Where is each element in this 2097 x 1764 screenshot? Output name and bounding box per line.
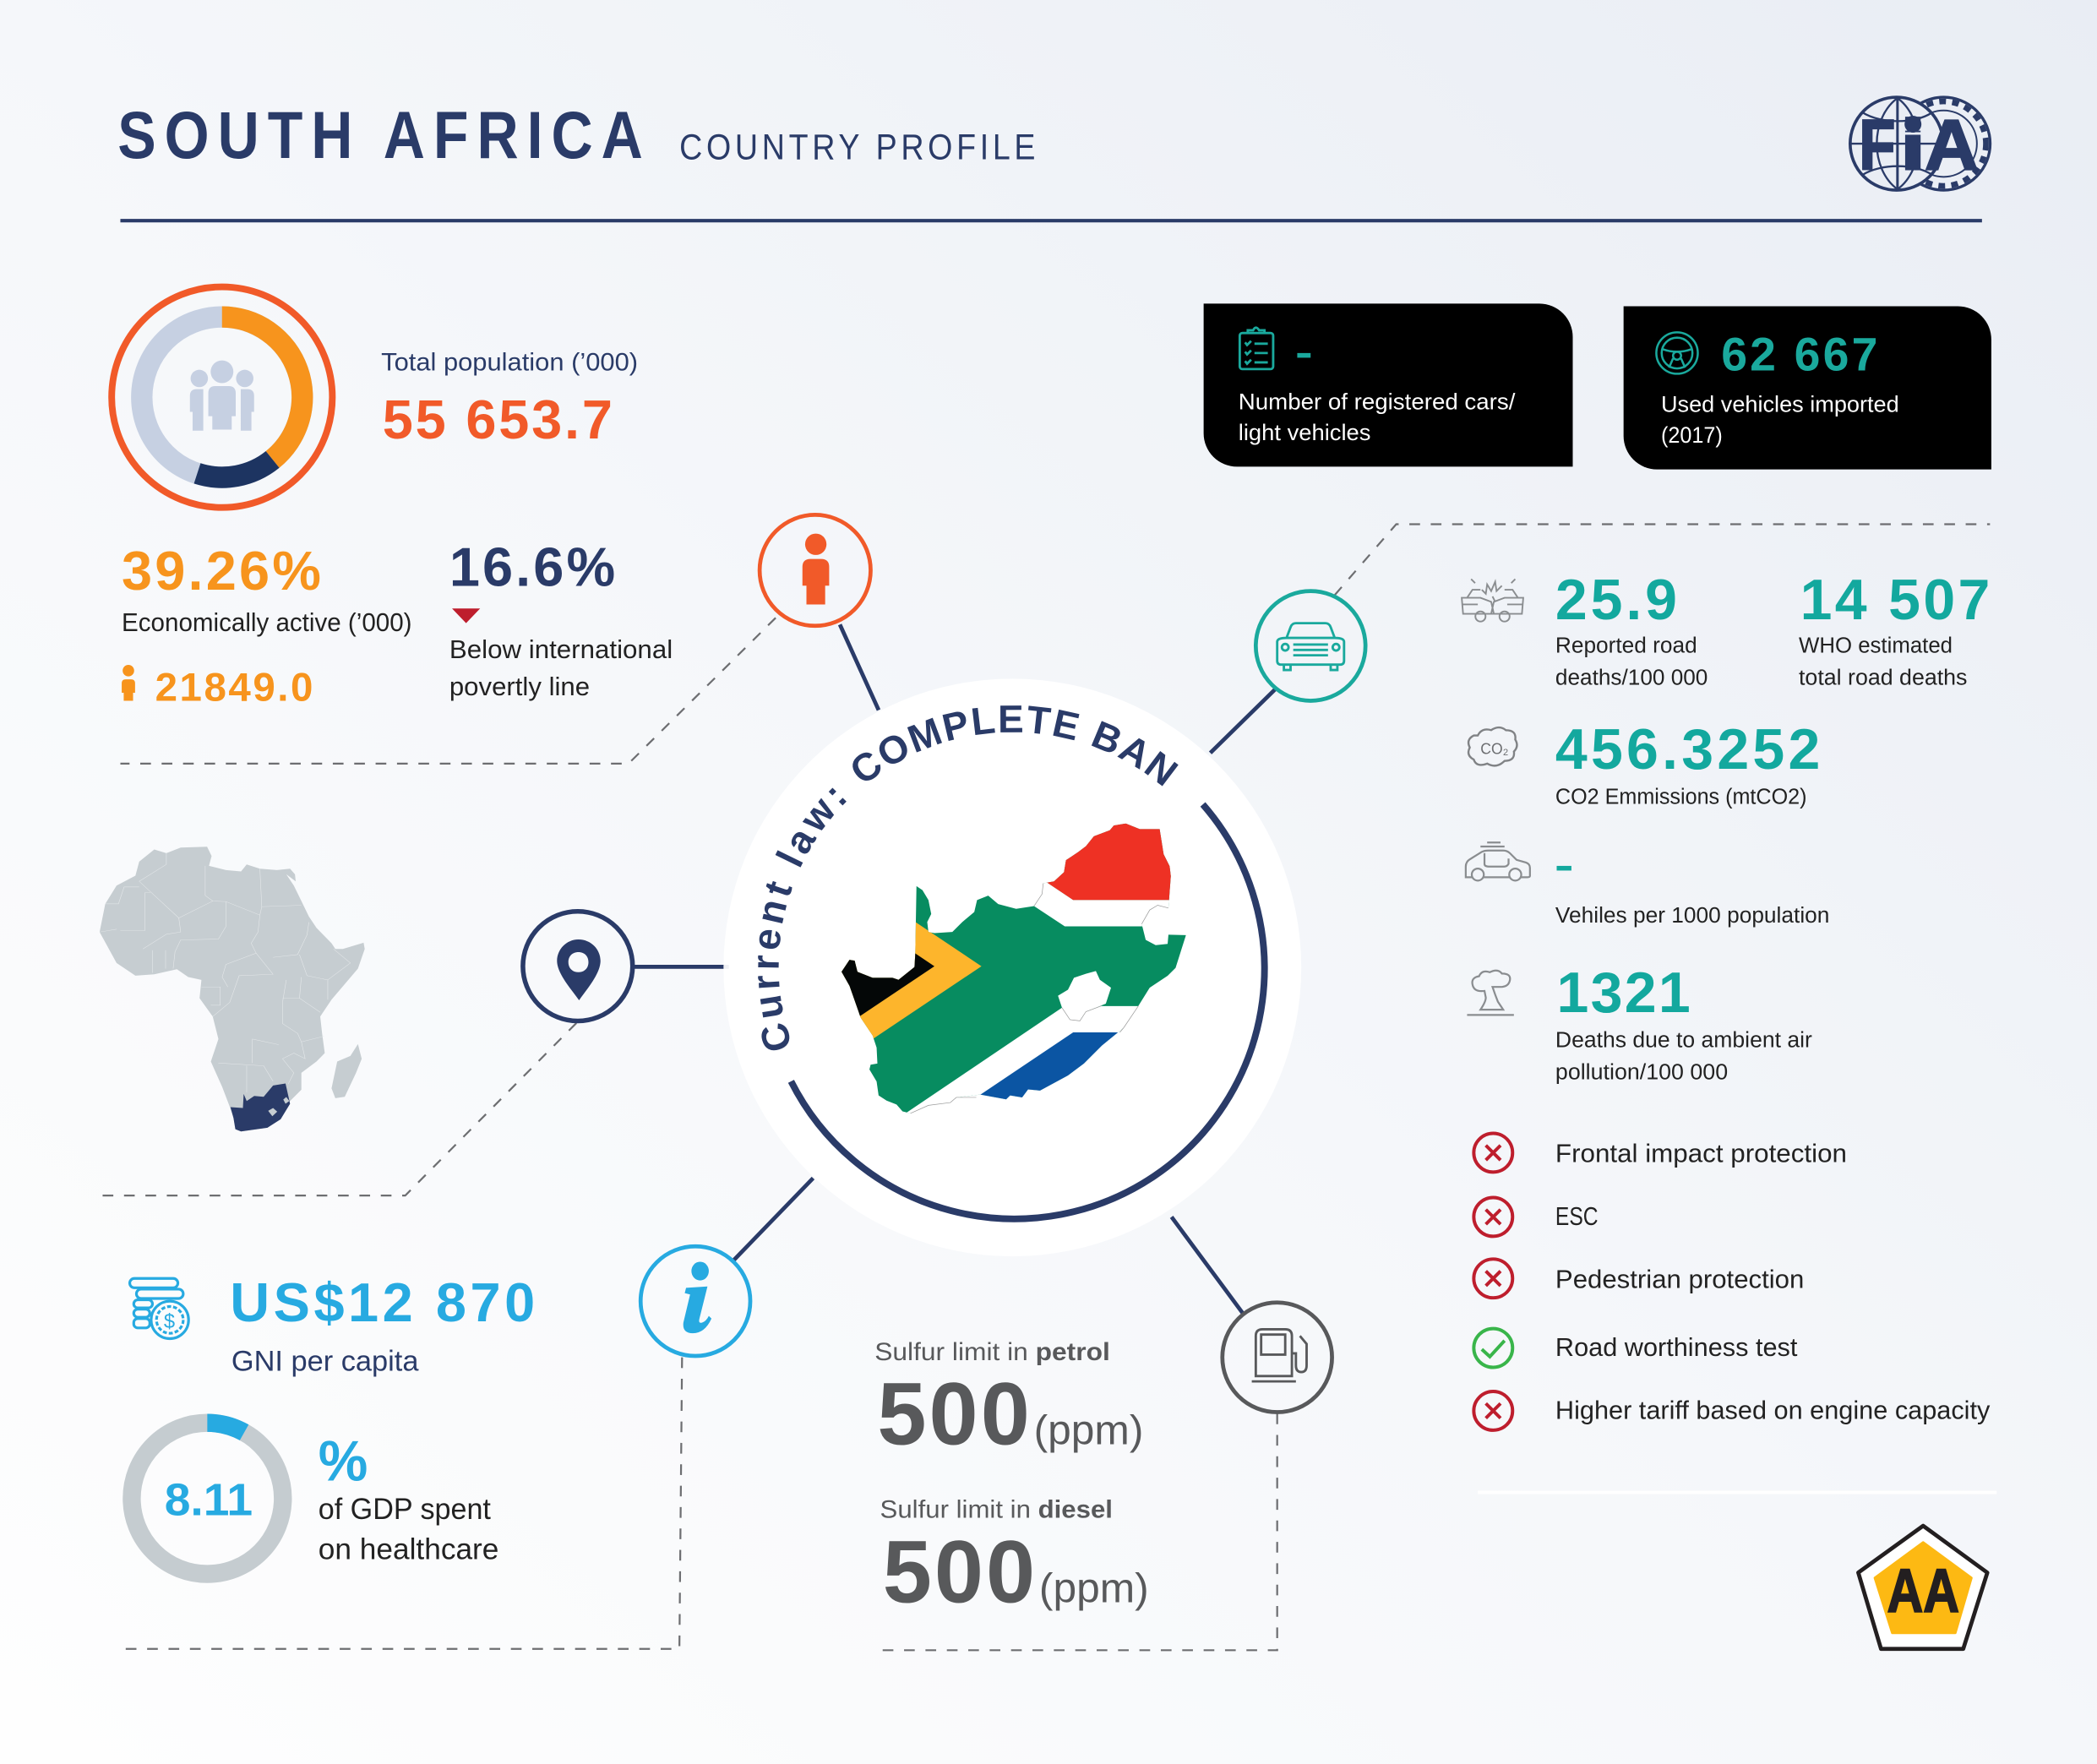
air pollution stat [1467,961,1812,1084]
poverty stat: 16.6% [449,536,615,597]
logo: FIA: i [1900,106,1925,184]
logo: FIA [1850,97,1991,190]
air pollution stat: Deaths due to ambient air [1555,1026,1812,1052]
hub: central circle [723,679,1301,1255]
flag map of South Africa [842,823,1186,1113]
item: tariff: Higher tariff based on engine capacity [1555,1395,1991,1424]
economically active: Economically active (’000) [122,607,412,637]
card: used vehicles [1624,306,1991,470]
title: SOUTH AFRICA [117,97,649,172]
icon: people [190,361,254,431]
sulfur limit: diesel: Sulfur limit in diesel [880,1496,1113,1524]
road deaths stats: WHO estimated [1799,632,1953,657]
CO2 emissions stat [1468,717,1820,808]
GNI per capita [130,1271,535,1377]
total population [381,348,638,450]
card: registered cars: Number of registered cars/ [1239,389,1516,414]
healthcare text: % [319,1429,368,1493]
healthcare text: on healthcare [319,1533,498,1566]
sulfur limit: petrol [874,1338,1143,1464]
sulfur limit: diesel: (ppm) [1039,1565,1149,1611]
road deaths stats: deaths/100 000 [1555,664,1708,689]
item: road worthiness [1473,1329,1798,1368]
item: frontal impact [1473,1134,1847,1172]
CO2 emissions stat: 456.3252 [1555,717,1820,781]
icon: CO2 cloud: CO₂ [1480,741,1509,758]
poverty stat [449,536,673,701]
road deaths stats [1462,568,1990,689]
air pollution stat: 1321 [1557,961,1691,1025]
icon: steering wheel [1656,332,1697,373]
item: road worthiness: Road worthiness test [1555,1332,1798,1362]
subtitle: COUNTRY PROFILE [679,127,1038,167]
poverty stat: povertly line [449,672,590,701]
icon: car side [1466,842,1530,880]
curved text: current law: Current law: COMPLETE BAN [758,705,1179,1051]
healthcare donut chart: 8.11 [165,1474,253,1525]
road deaths stats: Reported road [1555,632,1697,657]
vehicles per 1000 stat: Vehiles per 1000 population [1555,902,1829,928]
card: used vehicles: 62 667 [1721,328,1877,380]
poverty stat: Below international [449,634,673,664]
sulfur limit: diesel: 500 [883,1522,1035,1621]
item: pedestrian [1473,1259,1804,1298]
icon: person circle [760,514,870,626]
card: used vehicles: (2017) [1661,422,1723,448]
icon: coins [130,1278,188,1338]
economically active: 39.26% [122,540,321,602]
sulfur limit: petrol: (ppm) [1034,1408,1143,1454]
CO2 emissions stat: CO2 Emmissions (mtCO2) [1555,783,1807,808]
card: registered cars [1204,303,1572,466]
healthcare donut chart [132,1423,283,1574]
icon: location pin circle [523,912,633,1021]
air pollution stat: pollution/100 000 [1555,1059,1728,1084]
logo: AA [1858,1526,1987,1649]
item: ESC [1473,1197,1599,1236]
icon: smoke [1467,971,1514,1015]
total population: 55 653.7 [383,389,613,450]
economically active: 21849.0 [155,665,313,710]
population donut chart [112,287,332,508]
economically active [122,540,412,710]
GNI per capita: US$12 870 [230,1271,535,1333]
logo: AA: AA [1887,1556,1959,1625]
healthcare text: of GDP spent [319,1493,491,1526]
road deaths stats: 14 507 [1800,568,1990,632]
icon: person small [122,665,135,700]
item: frontal impact: Frontal impact protection [1555,1139,1847,1168]
item: ESC: ESC [1555,1201,1599,1231]
vehicles per 1000 stat [1466,842,1829,928]
total population: Total population (’000) [381,348,638,376]
icon: crash [1462,579,1523,622]
card: registered cars: light vehicles [1239,420,1370,445]
GNI per capita: GNI per capita [231,1345,419,1377]
icon: CO2 cloud [1468,727,1517,765]
GNI per capita: $ [164,1311,175,1333]
connector lines to hub [633,624,1277,1315]
arc [791,804,1265,1219]
card: used vehicles: Used vehicles imported [1661,392,1899,417]
logo: FIA: A [1925,106,1978,184]
logo: FIA: F [1860,106,1895,184]
icon: info circle [640,1246,750,1356]
icon: clipboard [1239,328,1273,369]
checklist [1473,1134,1991,1430]
healthcare text [319,1429,498,1566]
sulfur limit: petrol: Sulfur limit in petrol [874,1338,1110,1366]
item: tariff [1473,1391,1991,1430]
sulfur limit: diesel [880,1496,1149,1621]
icon: car circle [1255,591,1365,700]
road deaths stats: 25.9 [1555,568,1677,632]
road deaths stats: total road deaths [1799,664,1967,689]
icon: fuel pump circle [1223,1303,1332,1413]
map: Africa [100,847,365,1131]
sulfur limit: petrol: 500 [877,1365,1030,1464]
header: title [117,97,1038,172]
item: pedestrian: Pedestrian protection [1555,1264,1804,1293]
